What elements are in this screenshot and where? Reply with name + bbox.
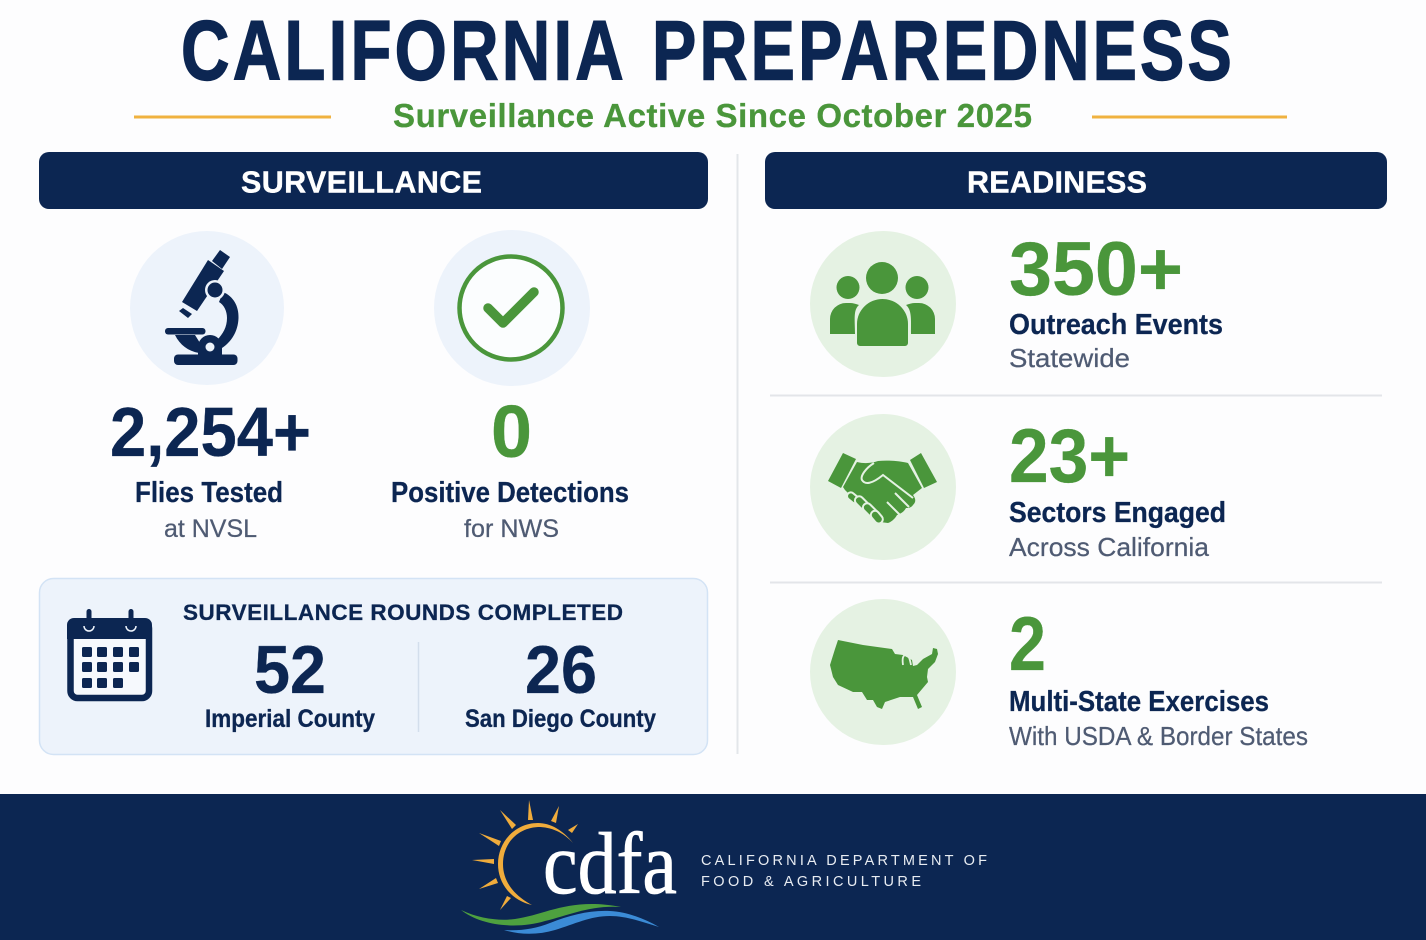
stat: imperial county: Imperial County [205,705,375,733]
stat: positive detections [391,390,629,543]
agency name [701,853,987,890]
stat: positive detections: Positive Detections [391,477,629,509]
heading: readiness [765,152,1387,209]
title [181,4,1235,98]
icon: us map [810,599,956,745]
stat: sectors engaged [1009,414,1226,562]
logo: cdfa sun and waves [461,800,677,934]
panel: readiness [765,152,1387,751]
stat: flies tested: at NVSL [164,515,257,543]
stat: san diego county: 26 [525,632,597,708]
panel: surveillance [39,152,708,754]
stat: san diego county [465,632,656,733]
stat: outreach events [1009,227,1223,373]
stat: outreach events: 350+ [1009,227,1183,312]
subtitle: Surveillance Active Since October 2025 [393,97,1032,134]
title: CALIFORNIA [181,4,627,98]
agency name: FOOD & AGRICULTURE [701,874,921,890]
stat: positive detections: 0 [491,390,532,473]
stat: flies tested: Flies Tested [135,477,283,509]
stat: sectors engaged: Across California [1009,532,1210,562]
footer [0,794,1426,940]
stat: imperial county [205,632,375,733]
stat: sectors engaged: Sectors Engaged [1009,497,1226,529]
stat: multi-state exercises [1009,602,1308,751]
heading: rounds: SURVEILLANCE ROUNDS COMPLETED [183,600,623,625]
icon: microscope [130,231,284,385]
icon: handshake [810,414,956,560]
stat: flies tested [110,393,311,543]
stat: outreach events: Outreach Events [1009,309,1223,341]
stat: multi-state exercises: With USDA & Border States [1009,721,1308,751]
stat: san diego county: San Diego County [465,705,656,733]
logo wordmark: cdfa [543,816,677,913]
stat: positive detections: for NWS [464,515,559,543]
heading: surveillance: SURVEILLANCE [241,166,482,200]
stat: multi-state exercises: 2 [1009,602,1046,687]
title: PREPAREDNESS [652,4,1235,98]
agency name: CALIFORNIA DEPARTMENT OF [701,853,987,869]
icon: people [810,231,956,377]
stat: sectors engaged: 23+ [1009,414,1130,499]
heading: readiness: READINESS [967,166,1147,200]
icon: calendar [67,609,152,698]
icon: check mark [434,230,590,386]
stat: imperial county: 52 [254,632,326,708]
heading: surveillance [39,152,708,209]
panel: surveillance rounds completed [40,578,708,754]
stat: outreach events: Statewide [1009,343,1130,373]
stat: flies tested: 2,254+ [110,393,311,471]
stat: multi-state exercises: Multi-State Exercises [1009,686,1269,718]
